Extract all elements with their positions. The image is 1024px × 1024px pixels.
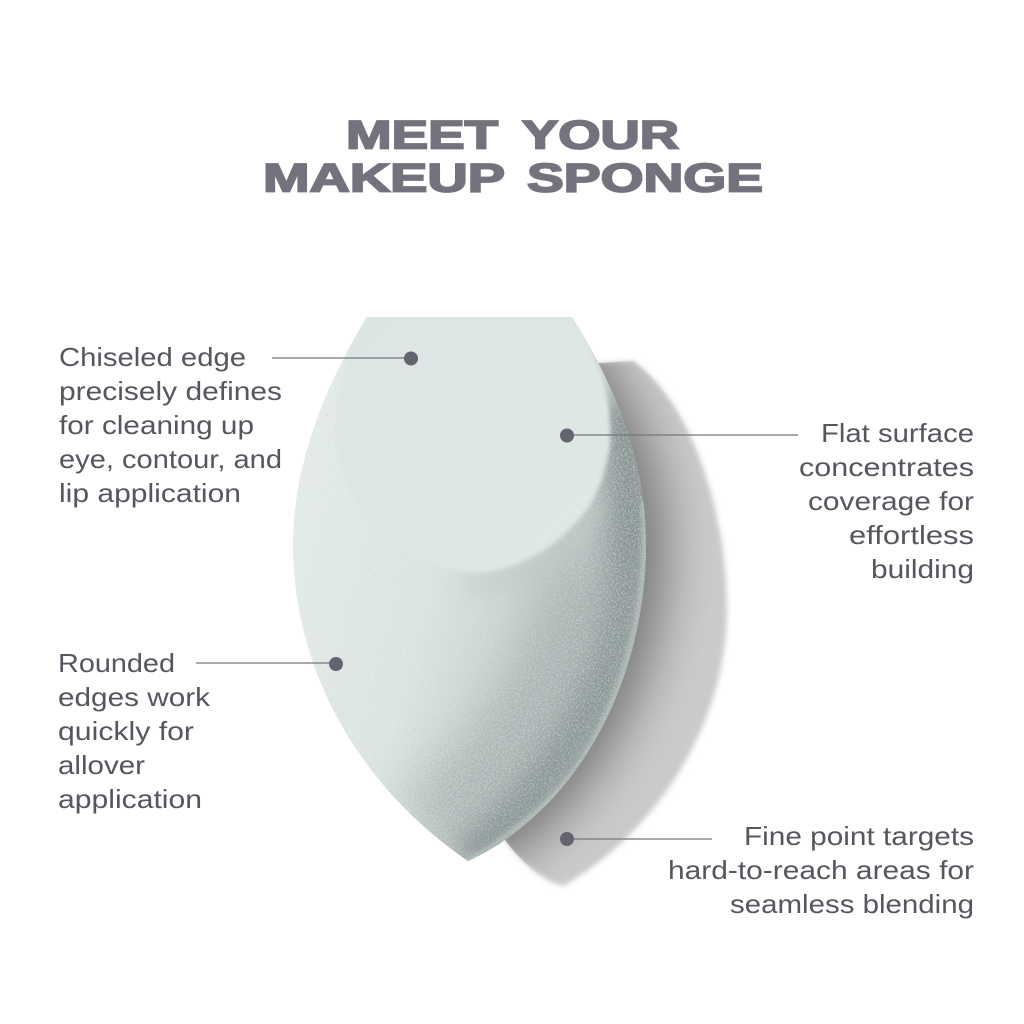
callout: chiseled edge: for cleaning up [59,410,254,440]
title: MEET [346,114,498,158]
callout: fine point: Fine point targets [744,821,974,851]
callout: flat surface: concentrates [799,452,974,482]
callout: flat surface [560,418,974,584]
callout: chiseled edge: lip application [59,478,241,508]
callout: chiseled edge: Chiseled edge [59,342,246,372]
callout: fine point: seamless blending [730,889,974,919]
title [263,114,763,200]
shaded ridge along the right side [465,400,631,858]
bevel shadow under flat surface [476,577,495,588]
callout: chiseled edge [59,342,418,508]
sponge cast shadow [504,358,730,888]
sponge texture [294,368,646,859]
callout: flat surface: effortless [849,520,974,550]
callout: rounded edges [58,648,343,814]
callout: chiseled edge: eye, contour, and [59,444,282,474]
makeup sponge [293,317,646,861]
callout: flat surface: Flat surface [821,418,974,448]
callout: rounded edges: quickly for [58,716,194,746]
rim light on the sponge edge [468,500,645,861]
title: SPONGE [527,156,763,200]
callout: fine point [560,821,974,919]
callout: rounded edges: application [58,784,202,814]
callout: rounded edges: allover [58,750,145,780]
callout: chiseled edge: precisely defines [59,376,282,406]
title: YOUR [522,114,679,158]
title: MAKEUP [263,156,505,200]
soft mid-tone band [425,570,585,825]
callout: rounded edges: edges work [58,682,211,712]
callout: rounded edges: Rounded [58,648,175,678]
callout: fine point: hard-to-reach areas for [668,855,974,885]
flat chiseled surface [336,310,610,572]
callout: flat surface: coverage for [808,486,974,516]
callout: flat surface: building [871,554,974,584]
